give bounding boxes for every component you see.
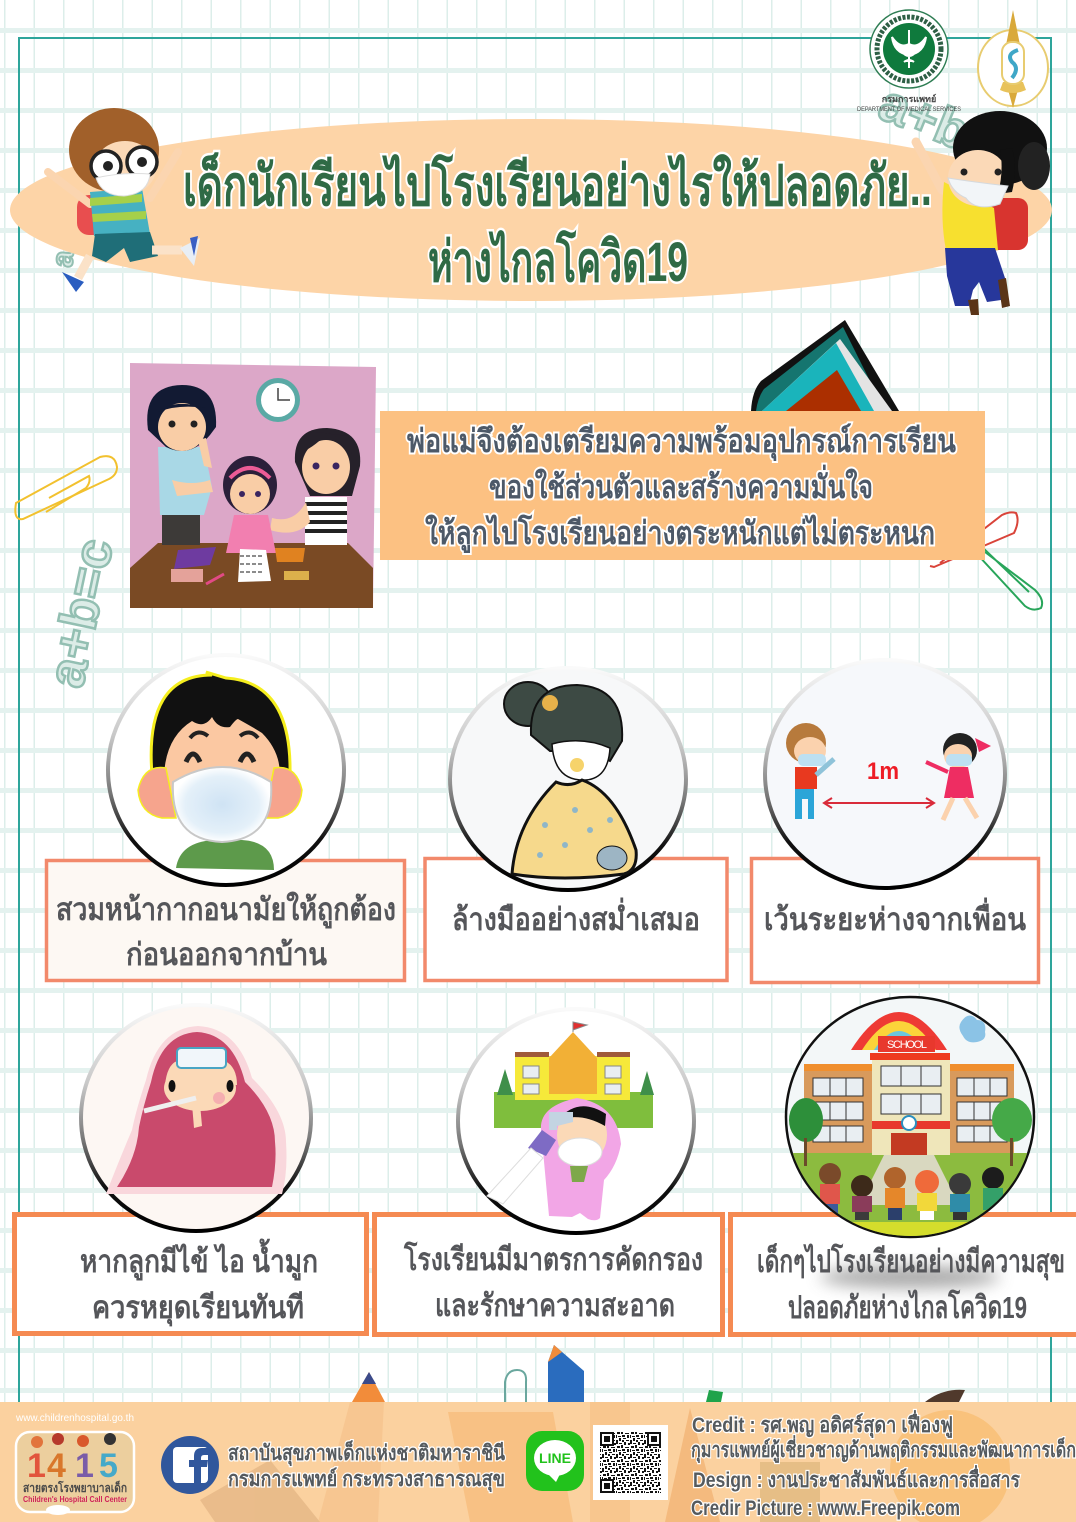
- illustration: school with children: [786, 997, 1036, 1243]
- label text: โรงเรียนมีมาตรการคัดกรอง: [403, 1241, 703, 1277]
- intro text panel: [380, 411, 985, 560]
- family illustration panel: [130, 363, 376, 608]
- logo: 1415 call center: 1: [75, 1447, 94, 1485]
- logo: 1415 call center: สายตรงโรงพยาบาลเด็ก: [23, 1480, 127, 1495]
- footer band: [0, 1402, 1076, 1522]
- panel: school screening: [374, 1009, 722, 1334]
- label text: เว้นระยะห่างจากเพื่อน: [764, 897, 1026, 937]
- illustration: children one metre apart: 1m: [867, 758, 899, 785]
- illustration: school with children: SCHOOL: [887, 1039, 927, 1051]
- clock icon: [256, 378, 300, 422]
- books and paper on table: [171, 547, 309, 584]
- credit text: Credir Picture : www.Freepik.com: [691, 1497, 960, 1520]
- label text: หากลูกมีไข้ ไอ น้ำมูก: [80, 1238, 318, 1281]
- panel: keep distance: [752, 660, 1038, 982]
- logo: ministry of public health: [857, 10, 961, 113]
- icon: line app: [526, 1431, 584, 1491]
- organization text: สถาบันสุขภาพเด็กแห่งชาติมหาราชินี: [228, 1439, 506, 1467]
- illustration: child in mask: [108, 655, 344, 885]
- decorative paper clips: [15, 456, 1042, 610]
- decorative stationery above footer: [352, 1345, 965, 1402]
- intro text panel: ของใช้ส่วนตัวและสร้างความมั่นใจ: [489, 464, 873, 505]
- panel: wash hands: [425, 668, 727, 980]
- text shadow smudge: [820, 1266, 1000, 1288]
- website text: www.childrenhospital.go.th: [15, 1412, 134, 1424]
- illustration: girl washing hands: [450, 668, 686, 890]
- icon: facebook: [161, 1436, 219, 1494]
- logo: ministry of public health: กรมการแพทย์: [882, 93, 936, 104]
- panel: school screening: และรักษาความสะอาด: [435, 1288, 675, 1323]
- panel: wear a mask: ก่อนออกจากบ้าน: [126, 937, 327, 972]
- credit text: Credit : รศ.พญ อดิศร์สุดา เฟื่องฟู: [692, 1409, 953, 1439]
- father figure: [147, 385, 216, 545]
- logo: 1415 call center: 5: [99, 1447, 118, 1485]
- panel: stay home if sick: ควรหยุดเรียนทันที: [92, 1290, 304, 1327]
- credit text: Design : งานประชาสัมพันธ์และการสื่อสาร: [693, 1464, 1021, 1492]
- logo: 1415 call center: 1: [27, 1447, 46, 1485]
- logo: institute emblem: [978, 10, 1048, 108]
- panel: wear a mask: [46, 655, 404, 980]
- logo: 1415 call center: Children's Hospital Call Center: [23, 1495, 127, 1504]
- character: boy with glasses: [48, 108, 200, 292]
- qr code: [593, 1425, 668, 1500]
- decorative formula: a+b top right: a+b: [871, 74, 977, 162]
- daughter figure: [223, 456, 277, 553]
- illustration: sick child in blanket: [81, 1005, 311, 1231]
- character: boy in yellow shirt: [916, 111, 1050, 315]
- decorative triangle book: [751, 320, 899, 411]
- label text: ล้างมืออย่างสม่ำเสมอ: [452, 897, 700, 937]
- panel: stay home if sick: [14, 1005, 366, 1334]
- title text: [183, 151, 932, 293]
- mother figure: [270, 428, 360, 545]
- icon: line app: LINE: [539, 1450, 571, 1466]
- logo: ministry of public health: DEPARTMENT OF MEDICAL SERVICES: [857, 107, 961, 113]
- label text: สวมหน้ากากอนามัยให้ถูกต้อง: [56, 891, 396, 929]
- panel: happy at school: [730, 997, 1076, 1334]
- credit text: [691, 1409, 1076, 1520]
- footer stationery silhouettes: [200, 1402, 1010, 1522]
- illustration: children one metre apart: [765, 660, 1005, 888]
- decorative formula: small left: a: [46, 249, 80, 269]
- organization text: กรมการแพทย์ กระทรวงสาธารณสุข: [228, 1467, 505, 1493]
- intro text panel: ให้ลูกไปโรงเรียนอย่างตระหนักแต่ไม่ตระหนก: [425, 514, 935, 554]
- decorative formula: a+b=c left: a+b=c: [37, 534, 125, 692]
- logo: 1415 call center: [16, 1432, 134, 1515]
- title text: ห่างไกลโควิด19: [428, 229, 688, 293]
- organization text: [228, 1439, 506, 1493]
- intro text panel: พ่อแม่จึงต้องเตรียมความพร้อมอุปกรณ์การเรียน: [407, 423, 956, 462]
- logo: 1415 call center: 4: [47, 1447, 66, 1485]
- title banner ellipse: [10, 119, 1052, 301]
- illustration: temperature screening: [458, 1009, 694, 1233]
